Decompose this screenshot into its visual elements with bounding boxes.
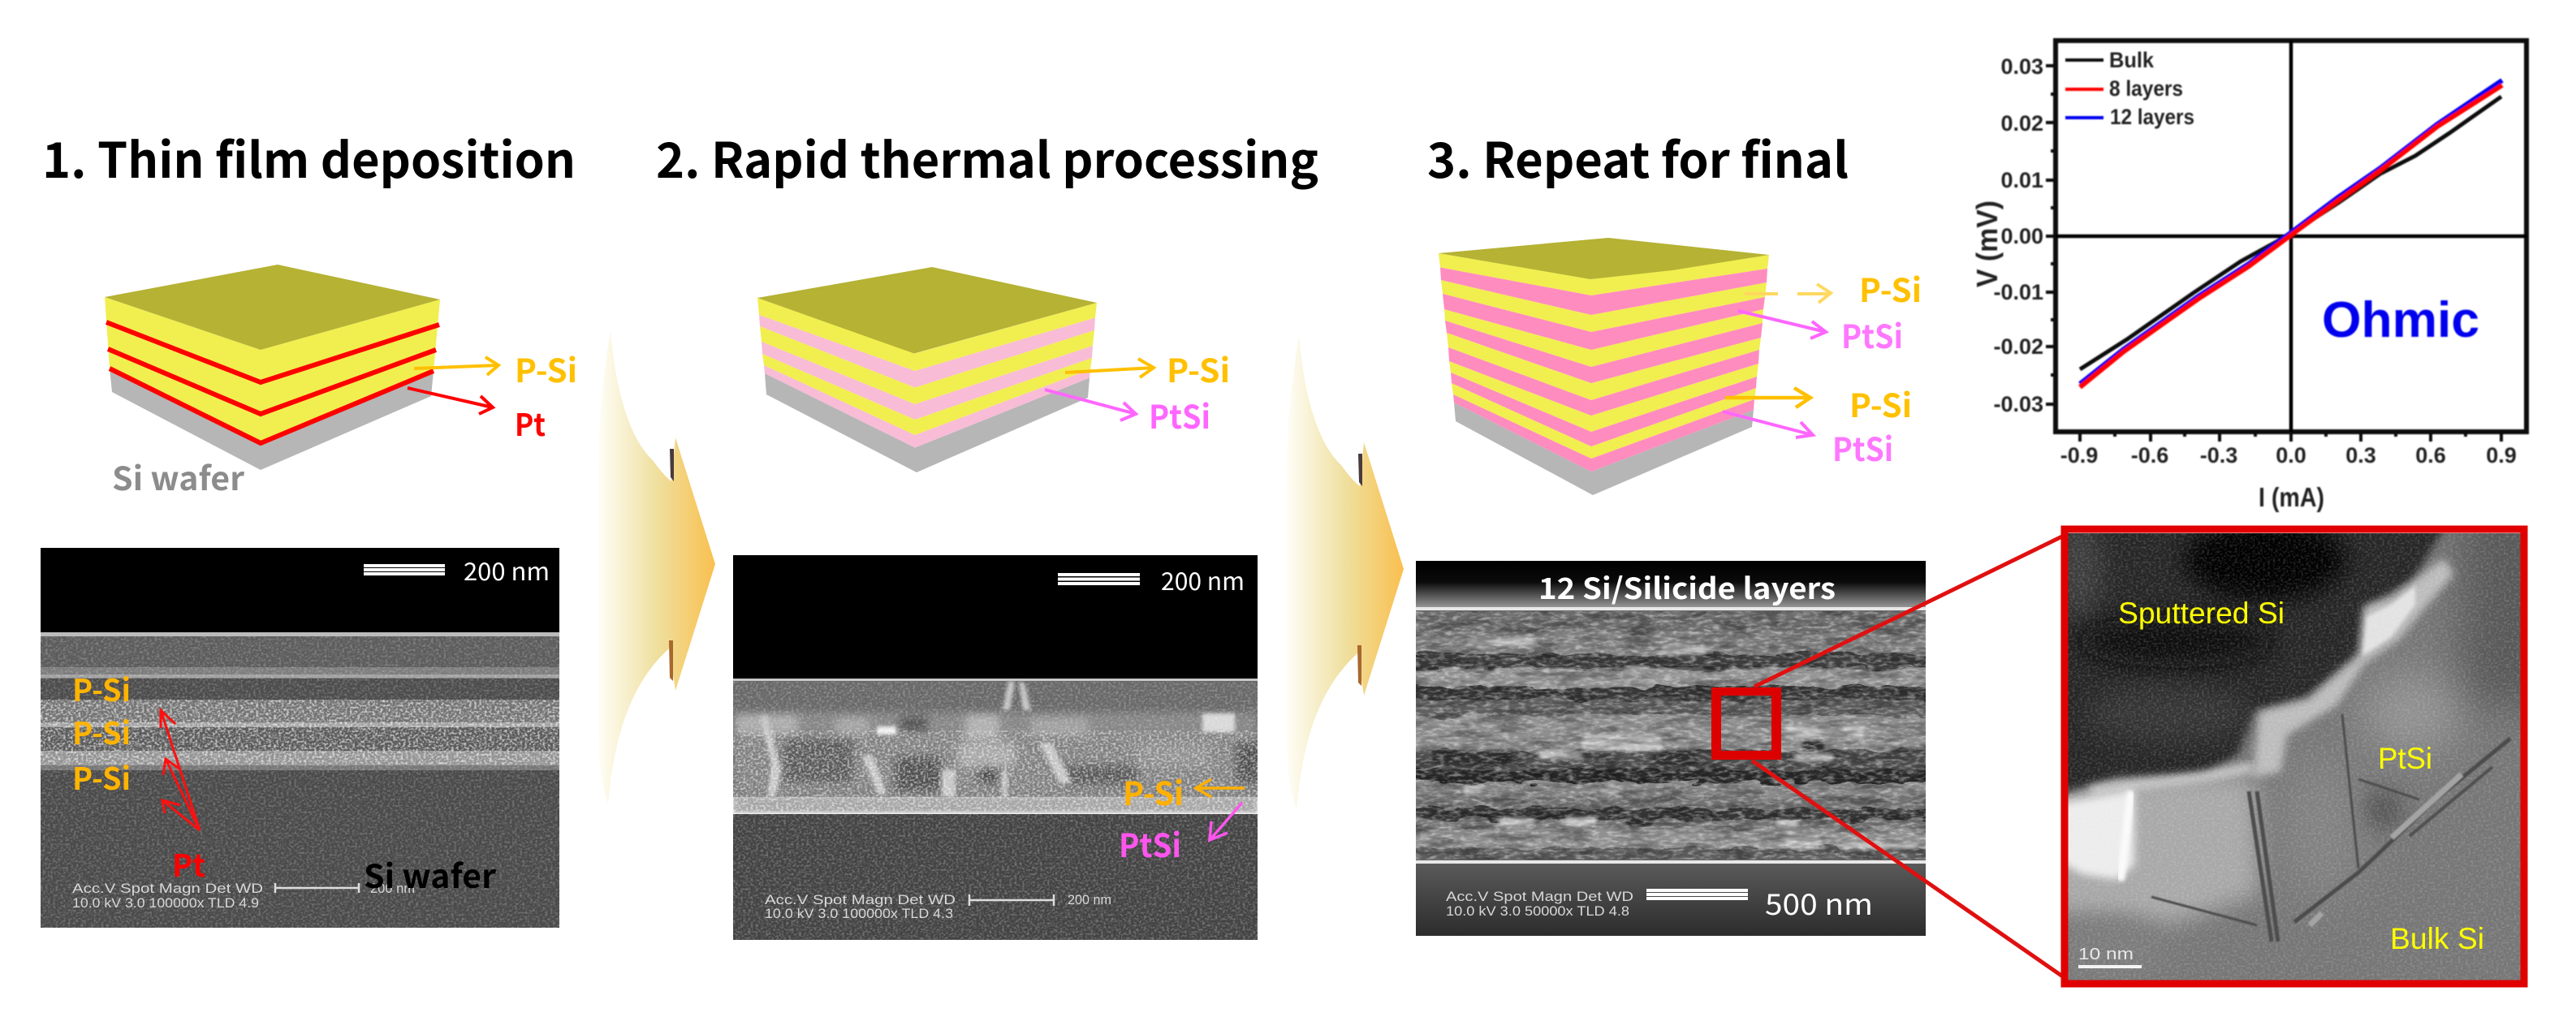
y axis tick labels: 0.01	[2000, 168, 2043, 192]
dark sputtered Si region	[2030, 503, 2460, 804]
label P-Si: P-Si	[1167, 345, 1230, 392]
panel: step 1 SEM micrograph	[41, 548, 559, 928]
instrument readout	[1446, 889, 1633, 919]
P-Si labels: P-Si	[72, 666, 131, 710]
mid-tone upper right	[2460, 487, 2574, 706]
panel: TEM micrograph	[2030, 487, 2574, 982]
arrow: step 2 to step 3	[1286, 335, 1404, 809]
wafer and multilayer stack	[1439, 253, 1769, 495]
y axis title: V (mV)	[1970, 200, 2004, 287]
surface and interface bright lines	[1416, 607, 1926, 864]
film base	[1416, 608, 1926, 863]
heading: step 3: 3. Repeat for final	[1427, 122, 1849, 192]
scale label: 500 nm	[1765, 881, 1873, 924]
arrow: step 1 to step 2	[598, 330, 715, 804]
arrow to lower PtSi	[1723, 412, 1813, 437]
zoom region box	[1711, 687, 1781, 760]
instrument readout	[72, 883, 414, 907]
Si substrate	[41, 770, 559, 928]
x axis tick labels: -0.6	[2131, 443, 2168, 468]
y axis tick labels: -0.03	[1993, 392, 2043, 416]
scale label: 200 nm	[1161, 562, 1245, 597]
panel: step 3 layer schematic	[1439, 238, 1922, 495]
P-Si layers	[105, 297, 440, 443]
very dark patch	[2184, 519, 2346, 601]
curve: bulk	[2080, 97, 2501, 369]
bright lower interface	[2091, 767, 2253, 791]
curve: 12 layers	[2080, 80, 2502, 384]
label upper P-Si: P-Si	[1859, 265, 1922, 312]
instrument readout: 10.0 kV 3.0 50000x TLD 4.8	[1446, 903, 1629, 919]
bright surface line	[733, 679, 1258, 681]
scale bar	[2078, 965, 2142, 968]
speckle texture	[733, 682, 1258, 940]
instrument readout: Acc.V Spot Magn Det WD	[1446, 889, 1633, 904]
legend: Bulk	[2065, 48, 2155, 72]
scale bar	[1646, 889, 1748, 900]
grain blotches	[733, 713, 1260, 797]
instrument readout: 200 nm	[370, 881, 415, 896]
bright interface band	[2253, 558, 2454, 778]
Pt pointer arrows	[161, 710, 200, 830]
dark patch in grain	[2356, 791, 2401, 830]
y axis tick labels	[1993, 54, 2043, 416]
P-Si labels	[75, 676, 128, 791]
dark mottling	[1416, 611, 1926, 860]
stronger speckle in layers	[41, 700, 559, 765]
x axis tick labels: -0.9	[2060, 443, 2098, 468]
twin lines	[2151, 714, 2419, 942]
speckle texture	[1416, 611, 1926, 860]
chart: I-V curve	[1970, 41, 2526, 512]
instrument scale bar	[275, 883, 359, 893]
cube top face	[757, 267, 1097, 354]
legend: 8 layers: 8 layers	[2109, 76, 2183, 101]
black vacuum area	[733, 555, 1258, 679]
lower-left mid tone	[2054, 917, 2168, 982]
label P-Si: P-Si	[515, 345, 577, 392]
scale label: 10 nm	[2078, 946, 2134, 963]
brightest left area	[2054, 790, 2134, 880]
annotation: Ohmic: Ohmic	[2322, 292, 2479, 348]
P-Si labels: P-Si	[72, 754, 131, 799]
grey base	[2067, 533, 2521, 980]
label lower P-Si: P-Si	[1849, 380, 1912, 427]
x axis tick labels: 0.0	[2276, 443, 2306, 468]
zoom connector lines	[1752, 536, 2064, 977]
instrument readout: 200 nm	[1068, 892, 1111, 907]
instrument readout: 10.0 kV 3.0 100000x TLD 4.9	[72, 895, 259, 911]
label PtSi: PtSi	[1149, 391, 1210, 438]
lighter corner haze	[2054, 519, 2103, 617]
zero axes	[2056, 41, 2526, 432]
bright silicide band	[733, 797, 1258, 812]
grain boundary	[2294, 739, 2510, 925]
label Si wafer: Si wafer	[112, 453, 245, 500]
instrument readout	[765, 892, 1111, 921]
wafer and layer stack	[757, 298, 1097, 472]
speckle texture	[41, 636, 559, 928]
panel: step 2 SEM micrograph	[733, 555, 1260, 940]
arrow to PtSi	[1210, 803, 1242, 840]
legend	[2065, 48, 2194, 129]
label Sputtered Si: Sputtered Si	[2118, 597, 2285, 630]
label Si wafer: Si wafer	[364, 851, 497, 898]
grey central grain	[2281, 755, 2362, 901]
speckle	[2067, 533, 2521, 980]
label lower PtSi: PtSi	[1832, 424, 1893, 471]
bright vertical streak	[2121, 791, 2131, 881]
bright and dark grain patches	[1433, 638, 1917, 849]
label PtSi: PtSi	[2378, 742, 2432, 775]
bright streaks	[760, 681, 1235, 797]
image caption: 12 Si/Silicide layers	[1538, 566, 1836, 608]
y axis tick labels: 0.00	[2000, 224, 2043, 248]
x axis tick labels: 0.3	[2345, 443, 2376, 468]
Pt interlayers	[106, 322, 439, 443]
instrument scale bar	[969, 894, 1054, 906]
P-Si labels: P-Si	[72, 709, 131, 753]
black vacuum area	[41, 548, 559, 634]
heading: step 1: 1. Thin film deposition	[42, 122, 576, 192]
label Pt: Pt	[515, 400, 546, 445]
scale label: 200 nm	[464, 552, 550, 588]
film layer bands	[41, 632, 559, 770]
dark top gradient	[1416, 561, 1926, 608]
x axis tick labels	[2060, 443, 2517, 468]
arrow to upper PtSi	[1738, 311, 1826, 338]
alternating layer bands	[1405, 632, 1940, 861]
dark patch left	[2078, 615, 2273, 667]
x axis tick labels: 0.9	[2486, 443, 2517, 468]
arrow to P-Si	[1196, 779, 1245, 797]
y axis tick labels: -0.01	[1993, 280, 2043, 304]
scale bar	[364, 564, 445, 575]
bright speckle in film	[733, 730, 1258, 812]
cube top face	[1439, 238, 1769, 279]
instrument readout: Acc.V Spot Magn Det WD	[72, 881, 263, 896]
arrow to P-Si label	[1065, 359, 1154, 377]
label upper PtSi: PtSi	[1841, 311, 1903, 358]
label P-Si: P-Si	[1123, 768, 1184, 815]
substrate	[733, 814, 1258, 940]
y axis tick labels: 0.02	[2000, 111, 2043, 136]
arrow to lower P-Si	[1725, 388, 1810, 407]
legend: 12 layers: 12 layers	[2110, 105, 2194, 129]
label Pt: Pt	[172, 841, 205, 886]
x axis tick labels: 0.6	[2415, 443, 2446, 468]
instrument readout: Acc.V Spot Magn Det WD	[765, 892, 956, 907]
label Bulk Si: Bulk Si	[2390, 922, 2484, 955]
lighter haze in dark region	[2086, 687, 2249, 742]
arrow to upper P-Si	[1745, 284, 1831, 303]
heading: step 2: 2. Rapid thermal processing	[656, 122, 1318, 192]
x axis title: I (mA)	[2259, 482, 2324, 512]
x axis tick labels: -0.3	[2200, 443, 2237, 468]
curve: 8 layers	[2080, 85, 2502, 387]
y axis tick labels: 0.03	[2000, 54, 2043, 79]
panel: step 2 layer schematic	[757, 267, 1230, 472]
arrow to Pt label	[408, 388, 493, 414]
bright lower-left contrast	[2030, 775, 2259, 925]
film base	[733, 679, 1258, 797]
arrow to PtSi label	[1045, 390, 1136, 420]
legend: Bulk: Bulk	[2109, 48, 2155, 72]
light grain area	[2362, 674, 2460, 755]
plot frame	[2056, 41, 2526, 432]
instrument readout: 10.0 kV 3.0 100000x TLD 4.3	[765, 906, 953, 921]
arrow to P-Si label	[414, 357, 498, 375]
ticks	[2046, 66, 2501, 442]
scale bar	[1058, 573, 1140, 585]
panel: step 1 layer schematic	[105, 265, 577, 500]
panel: step 3 SEM micrograph	[1405, 561, 1940, 936]
y axis tick labels: -0.02	[1993, 334, 2043, 359]
Si wafer base block	[110, 368, 434, 470]
TEM frame	[2065, 529, 2524, 984]
label PtSi: PtSi	[1119, 820, 1181, 867]
cube top face	[105, 265, 440, 350]
brightest interface part	[2362, 586, 2415, 656]
substrate	[1416, 864, 1926, 936]
